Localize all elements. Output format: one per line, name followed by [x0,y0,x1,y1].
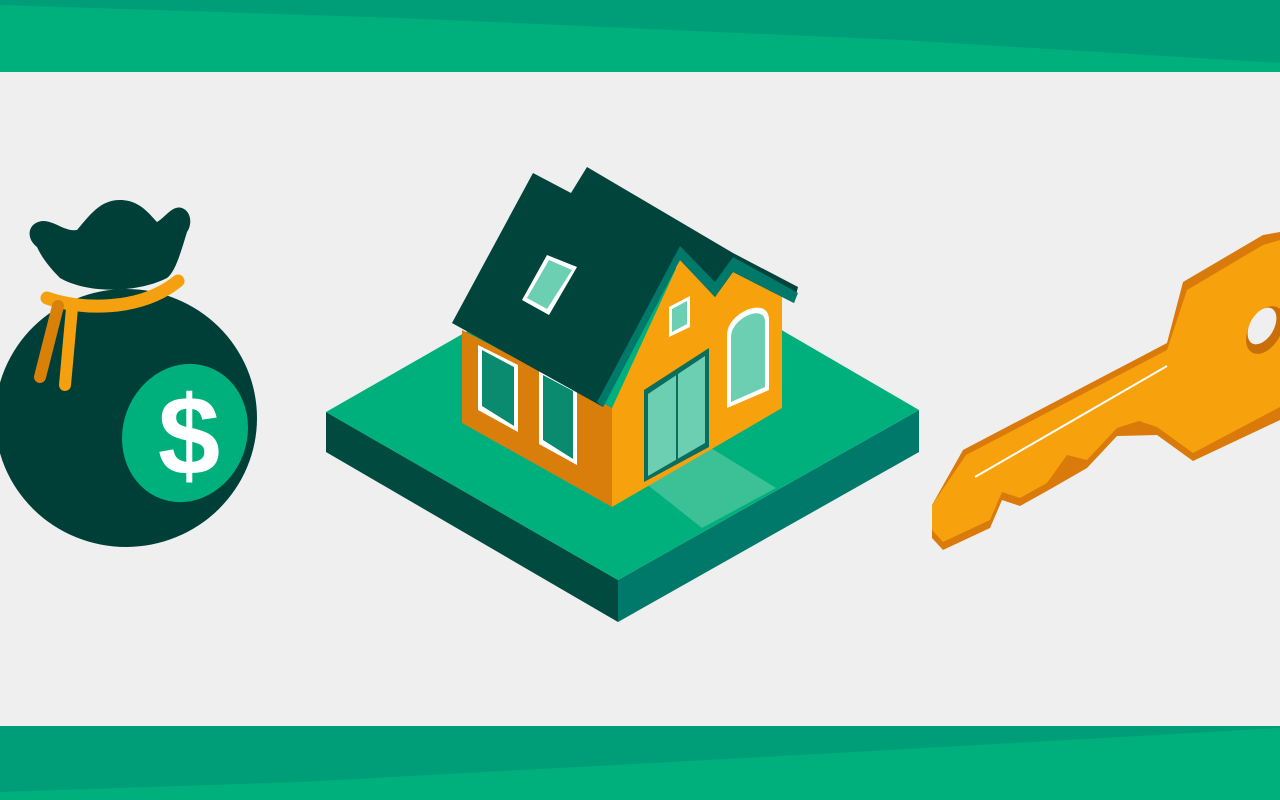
front gable wall [612,255,782,507]
platform [326,412,618,622]
skylight [522,255,577,315]
bag knot [30,200,190,290]
roof [452,167,798,407]
icon: money bag [0,200,267,547]
small window [669,296,690,337]
icon: key [932,232,1280,550]
coin with dollar [103,346,267,520]
door [644,348,709,482]
arched window [727,308,769,408]
windows left [478,345,518,432]
path [644,448,776,528]
house on platform [326,167,919,622]
coin with dollar: $ [158,373,220,498]
left wall [462,330,612,507]
top banner [0,0,1280,72]
bottom banner [0,726,1280,800]
orange tie [47,281,178,306]
